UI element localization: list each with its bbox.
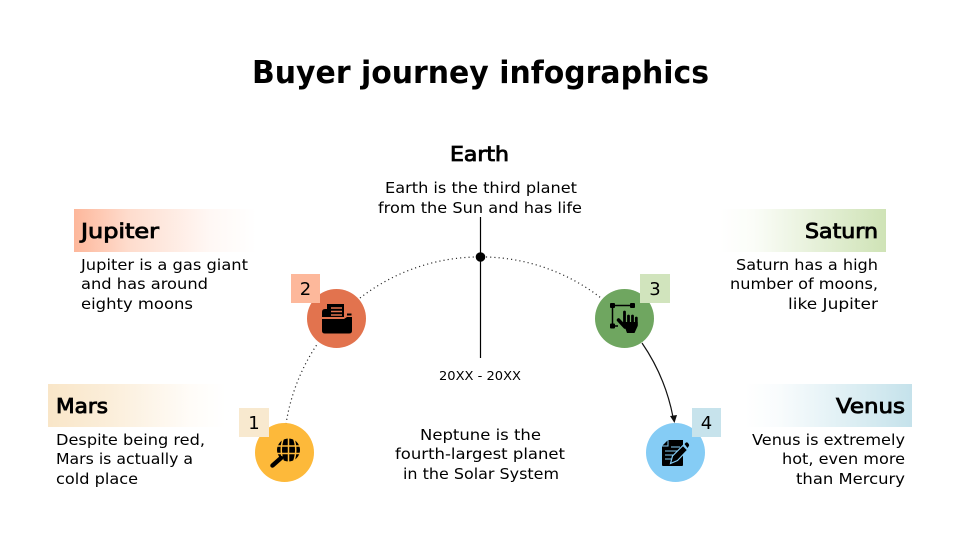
heading: Earth: Earth	[450, 142, 509, 166]
text: Jupiter description: Jupiter is a gas giant	[80, 256, 248, 274]
circle	[595, 289, 654, 348]
text: Mars description: Despite being red,	[56, 431, 205, 449]
text: Jupiter description: and has around	[81, 275, 208, 293]
text: Earth description	[378, 179, 582, 217]
icon: folder with document	[322, 304, 352, 334]
text: Venus description: hot, even more	[782, 450, 905, 468]
text: Venus description	[752, 431, 905, 488]
title: Buyer journey infographics	[252, 55, 709, 91]
heading band: Venus	[745, 384, 912, 427]
text: Mars description: Mars is actually a	[56, 450, 193, 468]
badge: 4: 4	[701, 413, 712, 434]
heading band: Mars	[48, 384, 226, 427]
dotted arc: step 1 to 2	[286, 343, 318, 424]
text: Neptune description	[395, 426, 565, 483]
panel: Earth	[378, 142, 582, 217]
panel: Saturn	[720, 209, 886, 313]
text: Neptune description: in the Solar System	[403, 465, 559, 483]
heading band: Venus: Venus	[836, 394, 905, 418]
text: Earth description: from the Sun and has life	[378, 199, 582, 217]
text: Venus description: Venus is extremely	[752, 431, 905, 449]
heading band: Saturn: Saturn	[805, 219, 878, 243]
dotted arc: Earth marker to step 3	[486, 257, 601, 298]
text: Earth description: Earth is the third planet	[385, 179, 577, 197]
heading band: Jupiter: Jupiter	[79, 219, 160, 243]
date label: 20XX - 20XX	[439, 368, 521, 383]
circle	[255, 423, 314, 482]
circle	[307, 289, 366, 348]
text: Jupiter description: eighty moons	[81, 295, 193, 313]
text: Saturn description: number of moons,	[730, 275, 878, 293]
badge: 3: 3	[649, 279, 661, 300]
text: Saturn description	[730, 256, 879, 313]
badge: 2: 2	[300, 279, 311, 300]
text: Neptune description: fourth-largest planet	[395, 445, 565, 463]
step 3	[595, 274, 670, 348]
text: Venus description: than Mercury	[796, 470, 905, 488]
text: Neptune description: Neptune is the	[420, 426, 541, 444]
text: Saturn description: like Jupiter	[788, 295, 879, 313]
arrow: step 3 to 4	[642, 343, 677, 423]
icon: globe with magnifier	[272, 437, 301, 466]
dotted arc: step 2 to Earth marker	[360, 257, 475, 298]
panel: Venus	[745, 384, 912, 488]
text: Mars description: cold place	[56, 470, 138, 488]
icon: document with pen	[662, 440, 689, 466]
step 1	[239, 408, 314, 482]
text: Mars description	[56, 431, 205, 488]
badge: 1: 1	[248, 413, 260, 434]
timeline marker	[476, 217, 485, 358]
icon: hand on selection frame	[610, 303, 638, 333]
circle	[646, 423, 705, 482]
panel: Jupiter	[74, 209, 256, 313]
heading band: Mars: Mars	[56, 394, 108, 418]
text: Jupiter description	[80, 256, 248, 313]
heading band: Jupiter	[74, 209, 256, 252]
step 2	[291, 274, 366, 348]
panel: Mars	[48, 384, 226, 488]
step 4	[646, 408, 721, 482]
heading band: Saturn	[720, 209, 886, 252]
text: Saturn description: Saturn has a high	[736, 256, 878, 274]
